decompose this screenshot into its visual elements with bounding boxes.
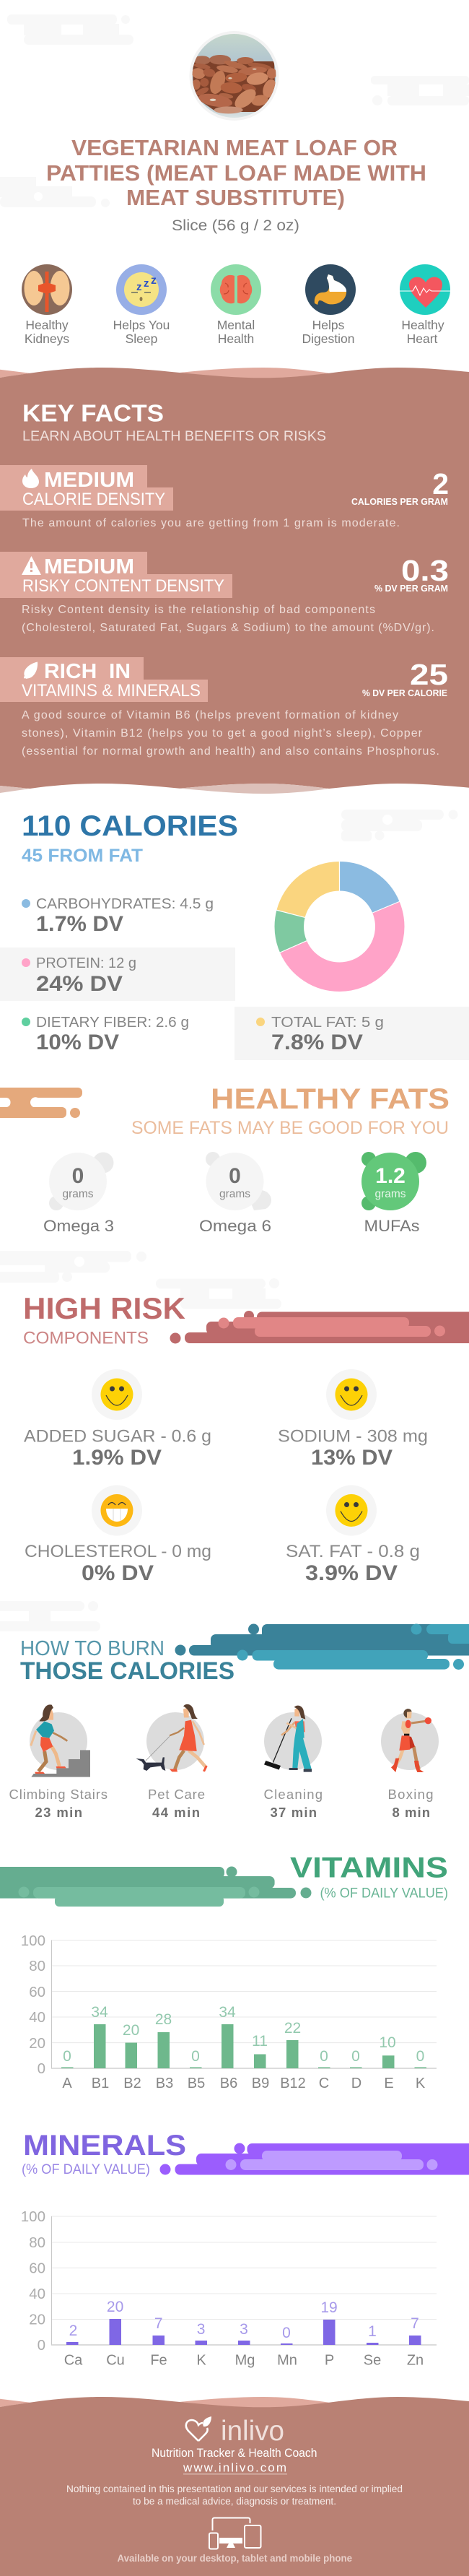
minerals bar chart: Mn xyxy=(277,2353,297,2369)
minerals bar chart: Cu xyxy=(106,2353,125,2369)
component: saturated fat xyxy=(286,1485,420,1585)
logo: inlivo: inlivo xyxy=(221,2416,284,2447)
benefit: healthy kidneys: Kidneys xyxy=(25,331,69,346)
fact: calorie density xyxy=(0,465,449,529)
benefit: helps you sleep xyxy=(113,264,170,346)
logo: inlivo xyxy=(186,2416,284,2447)
activity: pet care xyxy=(136,1704,208,1820)
benefit: helps you sleep: z xyxy=(151,274,157,287)
minerals bar chart: 7 xyxy=(154,2315,163,2332)
vitamins heading: VITAMINS xyxy=(290,1852,448,1883)
benefit: healthy kidneys: Healthy xyxy=(25,318,69,332)
benefit: helps you sleep: z xyxy=(136,281,141,293)
minerals bar chart: 20 xyxy=(29,2311,45,2328)
key facts subheading: LEARN ABOUT HEALTH BENEFITS OR RISKS xyxy=(22,428,326,444)
component: saturated fat: 3.9% DV xyxy=(305,1561,398,1585)
component: sodium xyxy=(278,1369,428,1470)
benefit: healthy heart: Healthy xyxy=(401,318,444,332)
fat: mufas xyxy=(361,1152,426,1235)
activity: climbing stairs: 23 min xyxy=(35,1805,82,1820)
vitamins bar chart: B1 xyxy=(92,2076,109,2091)
fat: omega 6: Omega 6 xyxy=(199,1217,271,1235)
benefit: helps digestion: Helps xyxy=(312,318,345,332)
disclaimer: to be a medical advice, diagnosis or treatment. xyxy=(133,2496,336,2507)
component: cholesterol: 0% DV xyxy=(82,1561,154,1585)
macro: protein xyxy=(22,955,136,996)
row background: protein xyxy=(0,947,235,1001)
fat: mufas: 1.2 xyxy=(375,1164,406,1188)
fact: rich in vitamins and minerals: (essential for normal growth and health) and also contains Phosphorus. xyxy=(22,745,439,758)
minerals bar chart: 0 xyxy=(282,2325,291,2341)
vitamins bar chart: E xyxy=(384,2076,394,2091)
vitamins bar chart: B6 xyxy=(220,2076,237,2091)
fact: rich in vitamins and minerals xyxy=(0,657,448,758)
background cloud: top left xyxy=(7,14,133,45)
activity: cleaning: Cleaning xyxy=(264,1787,323,1802)
vitamins bar chart: 40 xyxy=(29,2009,45,2026)
fact: calorie density: CALORIE DENSITY xyxy=(22,490,165,509)
minerals subheading: (% OF DAILY VALUE) xyxy=(22,2162,150,2177)
calories heading: 110 CALORIES xyxy=(22,810,238,842)
serving size: Slice (56 g / 2 oz) xyxy=(172,217,299,234)
component: cholesterol: CHOLESTEROL - 0 mg xyxy=(25,1542,211,1561)
benefit: helps digestion xyxy=(302,264,356,346)
vitamins bar chart: D xyxy=(351,2076,361,2091)
fat: omega 3 xyxy=(43,1153,114,1235)
vitamins bar chart: 0 xyxy=(351,2048,360,2065)
vitamins bar chart: C xyxy=(319,2076,329,2091)
vitamins bar chart: 34 xyxy=(219,2004,236,2021)
benefit: healthy heart: Heart xyxy=(407,331,438,346)
activity: climbing stairs: Climbing Stairs xyxy=(9,1787,108,1802)
minerals bar chart: K xyxy=(196,2353,206,2369)
activity: cleaning: 37 min xyxy=(270,1805,317,1820)
healthy fats banner shape xyxy=(0,1088,82,1118)
title xyxy=(46,135,426,210)
donut chart xyxy=(276,861,400,977)
vitamins subheading: (% OF DAILY VALUE) xyxy=(320,1886,448,1901)
vitamins bar chart: B9 xyxy=(252,2076,269,2091)
minerals bar chart: Ca xyxy=(64,2353,83,2369)
vitamins bar chart: B12 xyxy=(280,2076,306,2091)
vitamins bar chart: 60 xyxy=(29,1984,45,2000)
vitamins bar chart: 0 xyxy=(38,2060,45,2077)
fact: risky content density: % DV PER GRAM xyxy=(374,584,448,594)
benefit: healthy kidneys xyxy=(22,264,72,346)
fat: omega 6: grams xyxy=(219,1188,250,1200)
vitamins bar chart: 22 xyxy=(284,2020,301,2037)
vitamins bar chart: 20 xyxy=(29,2035,45,2052)
minerals heading: MINERALS xyxy=(23,2130,186,2161)
vitamins bar chart: 10 xyxy=(379,2034,396,2051)
key facts heading: KEY FACTS xyxy=(22,400,164,426)
macro: protein: PROTEIN: 12 g xyxy=(36,955,136,971)
vitamins bar chart: B2 xyxy=(123,2076,141,2091)
fact: rich in vitamins and minerals: 25 xyxy=(410,658,448,691)
title: MEAT SUBSTITUTE) xyxy=(126,185,345,210)
benefit: mental health: Mental xyxy=(217,318,255,332)
fact: calorie density: MEDIUM xyxy=(44,469,134,492)
fact: rich in vitamins and minerals: % DV PER CALORIE xyxy=(362,688,447,698)
macro: total fat: 7.8% DV xyxy=(271,1031,363,1054)
fact: calorie density: CALORIES PER GRAM xyxy=(351,497,448,507)
background cloud: calories xyxy=(341,810,457,841)
vitamins bar chart: 20 xyxy=(123,2022,139,2039)
vitamins bar chart: 100 xyxy=(21,1933,45,1949)
activity: boxing: 8 min xyxy=(393,1805,430,1820)
vitamins bar chart: 0 xyxy=(416,2048,424,2065)
minerals bar chart: 1 xyxy=(368,2323,377,2340)
high risk heading: HIGH RISK xyxy=(23,1291,185,1325)
burn heading: THOSE CALORIES xyxy=(20,1657,234,1685)
availability note: Available on your desktop, tablet and mobile phone xyxy=(117,2552,352,2564)
fat: mufas: MUFAs xyxy=(364,1217,420,1235)
website: www.inlivo.com xyxy=(183,2461,286,2474)
minerals bar chart: 60 xyxy=(29,2260,45,2276)
benefit: helps digestion: Digestion xyxy=(302,331,354,346)
fact: calorie density: 2 xyxy=(432,467,449,500)
component: saturated fat: SAT. FAT - 0.8 g xyxy=(286,1542,420,1561)
fat: omega 6 xyxy=(199,1152,271,1235)
title: PATTIES (MEAT LOAF MADE WITH xyxy=(46,160,426,186)
fat: omega 6: 0 xyxy=(229,1164,241,1188)
vitamins bar chart: 28 xyxy=(155,2011,172,2028)
background cloud: high risk left xyxy=(0,1251,146,1283)
burn heading xyxy=(20,1637,234,1685)
macro: dietary fiber: 10% DV xyxy=(36,1031,119,1054)
background cloud: title left xyxy=(0,177,110,207)
minerals bar chart: 19 xyxy=(320,2299,338,2316)
healthy fats heading: HEALTHY FATS xyxy=(211,1083,450,1115)
benefit: healthy heart xyxy=(400,264,450,346)
macro: carbohydrates: CARBOHYDRATES: 4.5 g xyxy=(36,896,214,912)
activity: climbing stairs xyxy=(9,1704,108,1820)
minerals bar chart: P xyxy=(325,2353,334,2369)
vitamins bar chart: 11 xyxy=(252,2033,268,2050)
minerals bar chart: 100 xyxy=(21,2208,45,2225)
high risk subheading: COMPONENTS xyxy=(23,1329,149,1348)
vitamins bar chart: B3 xyxy=(156,2076,173,2091)
macro: carbohydrates: 1.7% DV xyxy=(36,912,123,936)
minerals bar chart: 80 xyxy=(29,2234,45,2251)
fact: risky content density: MEDIUM xyxy=(44,555,134,578)
component: cholesterol xyxy=(25,1485,211,1585)
benefit: helps you sleep: Helps You xyxy=(113,318,170,332)
fat: omega 3: 0 xyxy=(72,1164,84,1188)
background cloud: burn xyxy=(0,1601,100,1631)
panel: key facts xyxy=(0,368,469,794)
vitamins bar chart: 0 xyxy=(63,2048,71,2065)
activity: pet care: Pet Care xyxy=(148,1787,205,1802)
benefit: mental health: Health xyxy=(218,331,254,346)
minerals bar chart: Zn xyxy=(407,2353,424,2369)
minerals bar chart: 40 xyxy=(29,2286,45,2302)
background cloud: high risk right xyxy=(156,1278,281,1309)
panel: footer xyxy=(0,2397,469,2576)
fact: calorie density: The amount of calories you are getting from 1 gram is moderate. xyxy=(22,517,400,529)
title: VEGETARIAN MEAT LOAF OR xyxy=(71,135,398,160)
vitamins bar chart: 80 xyxy=(29,1958,45,1974)
fact: risky content density: (Cholesterol, Saturated Fat, Sugars & Sodium) to the amount (%DV/gr). xyxy=(22,622,434,634)
vitamins bar chart: 0 xyxy=(191,2048,200,2065)
vitamins bar chart: 34 xyxy=(91,2004,108,2021)
minerals banner xyxy=(160,2143,469,2175)
macro: protein: 24% DV xyxy=(36,972,123,996)
disclaimer xyxy=(66,2484,403,2507)
minerals bar chart xyxy=(21,2208,437,2369)
minerals bar chart: Fe xyxy=(150,2353,167,2369)
activity: boxing xyxy=(381,1709,439,1820)
healthy fats subheading: SOME FATS MAY BE GOOD FOR YOU xyxy=(131,1118,449,1138)
minerals bar chart: Mg xyxy=(235,2353,255,2369)
macro: total fat xyxy=(256,1015,384,1054)
vitamins banner xyxy=(0,1866,312,1907)
minerals bar chart: 7 xyxy=(411,2315,419,2332)
fact: rich in vitamins and minerals: stones), Vitamin B12 (helps you to get a good night’s sleep), Copper xyxy=(22,727,423,740)
minerals bar chart: 3 xyxy=(240,2321,248,2338)
macro: dietary fiber xyxy=(22,1015,189,1054)
minerals bar chart: 0 xyxy=(38,2337,45,2354)
fact: risky content density xyxy=(0,552,449,634)
fact: risky content density: Risky Content density is the relationship of bad components xyxy=(22,604,375,616)
tagline: Nutrition Tracker & Health Coach xyxy=(152,2446,317,2460)
component: added sugar xyxy=(24,1369,211,1470)
icon: devices xyxy=(209,2518,261,2549)
background cloud: top right xyxy=(371,76,469,105)
benefit: helps you sleep: z xyxy=(144,277,149,290)
row background: total fat xyxy=(234,1007,469,1060)
disclaimer: Nothing contained in this presentation and our services is intended or implied xyxy=(66,2484,403,2494)
macro: total fat: TOTAL FAT: 5 g xyxy=(271,1015,384,1031)
component: added sugar: 1.9% DV xyxy=(72,1446,162,1470)
fat: omega 3: grams xyxy=(62,1188,94,1200)
minerals bar chart: Se xyxy=(364,2353,381,2369)
component: added sugar: ADDED SUGAR - 0.6 g xyxy=(24,1427,211,1446)
minerals bar chart: 3 xyxy=(197,2321,205,2338)
fat: mufas: grams xyxy=(374,1188,406,1200)
fact: risky content density: RISKY CONTENT DENSITY xyxy=(22,576,224,596)
minerals bar chart: 2 xyxy=(69,2323,77,2339)
fact: rich in vitamins and minerals: VITAMINS & MINERALS xyxy=(22,681,201,701)
component: sodium: SODIUM - 308 mg xyxy=(278,1427,428,1446)
fat: omega 3: Omega 3 xyxy=(43,1217,114,1235)
vitamins bar chart: K xyxy=(416,2076,426,2091)
macro: dietary fiber: DIETARY FIBER: 2.6 g xyxy=(36,1015,189,1031)
fact: rich in vitamins and minerals: RICH IN xyxy=(44,660,131,683)
fact: risky content density: 0.3 xyxy=(401,554,449,587)
burn heading: HOW TO BURN xyxy=(20,1637,165,1660)
benefit: helps you sleep: Sleep xyxy=(126,331,157,346)
vitamins bar chart: 0 xyxy=(320,2048,328,2065)
activity: cleaning xyxy=(264,1706,323,1820)
activity: pet care: 44 min xyxy=(152,1805,200,1820)
food photo: kidney beans xyxy=(189,31,279,121)
vitamins bar chart xyxy=(21,1933,437,2091)
fat calories subheading: 45 FROM FAT xyxy=(22,846,143,866)
vitamins bar chart: B5 xyxy=(188,2076,205,2091)
fact: rich in vitamins and minerals: A good source of Vitamin B6 (helps prevent formation of kidney xyxy=(22,709,398,721)
high risk banner xyxy=(170,1311,469,1343)
macro: carbohydrates xyxy=(22,896,214,936)
component: sodium: 13% DV xyxy=(311,1446,393,1470)
minerals bar chart: 20 xyxy=(107,2299,123,2315)
benefit: mental health xyxy=(211,264,261,346)
burn banner xyxy=(175,1623,469,1670)
vitamins bar chart: A xyxy=(62,2076,72,2091)
activity: boxing: Boxing xyxy=(388,1787,433,1802)
